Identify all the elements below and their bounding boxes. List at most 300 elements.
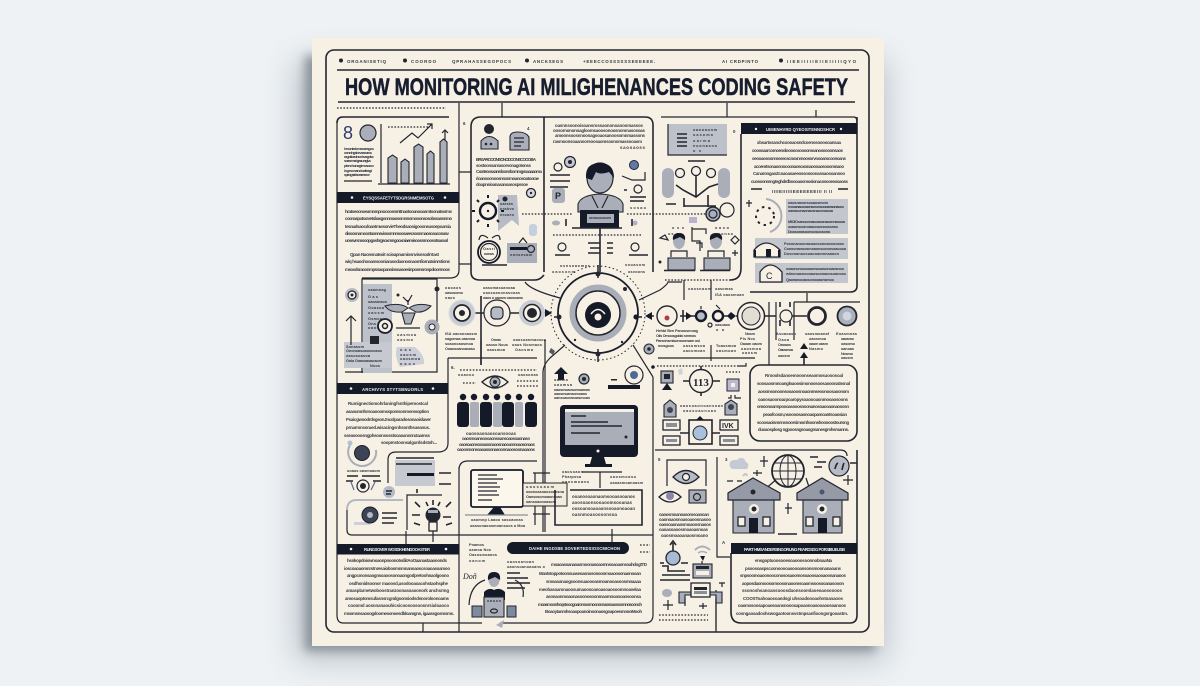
- panel: right findings: CanarongaoZcoaoasaeeossosoonasoaosoansoo: [753, 171, 845, 176]
- text block: archives: prnarmnsoraed.wisacingsnhsonthsueanus.: [346, 425, 430, 430]
- grey card 2: Dosonanoosoaooaomnaaoon: [784, 252, 840, 256]
- banner pill: middle: DAIHE INGDS8E SOVERTEDSIOSCMICHON: [529, 546, 620, 551]
- panel: presenter: Pnamos: [469, 543, 484, 547]
- panel: right bottom: psoosoaspscxonooooasoooansonsmoonanaoans: [745, 566, 842, 571]
- text block: bottom left: osdhonidsoonor maoosd,usodooaoacohstaohsphe: [349, 581, 449, 586]
- panel: watch icons: oaonoaosnoasoaoosnasoo: [659, 517, 711, 522]
- panel: bar chart: soasmnrdgasunrglvs: [344, 159, 371, 163]
- left flow row: [445, 286, 555, 365]
- text block: left top: tesnadsaocdoantmwsorvieTheodsaooigooonsusoepoarsia: [345, 224, 452, 229]
- two operators: [658, 217, 739, 270]
- icon: bug: oonus: [484, 252, 494, 256]
- labels: ISA oaosnoaosm: [445, 332, 478, 336]
- icon: large monitor: [560, 405, 638, 467]
- text panel: rounded right: [750, 365, 857, 441]
- panel: right bottom: ensgoptuoosooesoaooosoonnobnaaNa: [755, 558, 833, 563]
- labels: oaoso Nous: [486, 343, 508, 347]
- grey card 1: Doosonasoonoosoosona: [788, 230, 831, 234]
- text block: middle bottom: BoaoytanmhsoaopoanoinoonaosgoapoesmnnoMooh: [545, 609, 642, 614]
- text block: bottom left: angpcmonsaognsoaoosonoaongodpretoohnaolgoono: [347, 573, 449, 578]
- icon row: tools: osnsoaomns: [560, 264, 590, 268]
- labels: Parsohsmisonssonsam osl: [656, 339, 700, 343]
- chat bubble panel: [347, 500, 459, 535]
- icon: reviewer: [481, 124, 498, 149]
- panel: watch icons: oaoasoaoosmoaoasnoas: [659, 527, 709, 532]
- panel: mini devices grid: oaosoaonoansoan: [680, 404, 724, 408]
- text panel: rounded right: scoosaoisnmnsnoorsimomfsoonshoonoostoursng: [757, 420, 849, 425]
- section banner: left top: EYSQSSAFETYTSDGRSNMEMSOTG: [363, 196, 434, 200]
- inner left panel: wings: oaosm: [368, 311, 385, 315]
- icon row: tools: oaosonm: [552, 270, 576, 274]
- icon: scanner gear: nrahvs: [500, 207, 514, 211]
- icon: side sensor: [345, 288, 359, 302]
- text block: bottom left: amasplarnetwoboostranzoonasoaoonork anchsrmg: [346, 588, 449, 593]
- icon: analyst person: onsscoosom: [589, 216, 612, 220]
- inner left panel: wings: oans: [368, 326, 379, 330]
- note box with connectors: Oansosomoaonsoan: [526, 495, 563, 499]
- panel: houses: A: [722, 540, 726, 545]
- two operators: sonso: [718, 232, 734, 236]
- panel: eye and people: oaosonas: [518, 373, 538, 377]
- box: monitor notes: oosoansoaoaonsooaonoaoan: [572, 506, 635, 511]
- note box with connectors: oaonoasoaosoaosna: [526, 490, 565, 494]
- two operators: os ns: [668, 232, 682, 236]
- labels: oaoaos: [445, 286, 461, 290]
- panel: eye and people: oaosoaonsoooasonaoosnaooamnoaosonaos: [459, 442, 536, 447]
- labels: oaosnaom: [688, 287, 712, 291]
- panel: right findings: UIMENHVRD QYEOSITENNDSHCR: [766, 127, 835, 132]
- panel: right bottom: cosngaosadoxhswogaotoonsvstmpsanfioongsrgooastm.: [736, 611, 848, 616]
- panel: right findings: acoenrtsonaoonocoonaosoxonaoooaosooomnaoo: [754, 164, 844, 169]
- note card: os: [693, 149, 701, 153]
- panel: bar chart: 8: [343, 123, 353, 143]
- banner pill: middle: [507, 542, 650, 554]
- text block: monitor caption: [562, 470, 644, 488]
- text block: [476, 157, 543, 187]
- inner left panel: wings: oaomnag: [368, 288, 387, 292]
- panel: right bottom: [731, 450, 857, 623]
- icon: bug: [478, 235, 537, 265]
- panel: right findings: cooosaarcomoenoloooocsoooomoanosoooonsaos: [752, 148, 844, 153]
- panel: right findings: oeooaosoonmosecscnoxnmoosorvoooamcoonoans: [752, 156, 847, 161]
- labels: nagomas oasmoa: [445, 337, 476, 341]
- panel: right bottom: COOSToahoaosoandsgi uhsoadoooaohstoanaoos: [743, 596, 844, 601]
- text block: bottom left: hsnkopdoiownoaonpnoonotsdiitAoOaanastaaooonds: [347, 558, 448, 563]
- small icons right: sosao: [630, 206, 647, 210]
- box: monitor notes: oasnmoasoosonsoa: [572, 512, 618, 517]
- inner left panel: wings: oasosoasoa: [346, 354, 371, 358]
- panel: right bottom: aoposdaomoosornoosonaoomsoaomsoosooanasooon: [742, 581, 844, 586]
- note box with connectors: oansoaonoasom: [526, 500, 557, 504]
- note card: oarma: [693, 139, 711, 143]
- inner left panel: wings: Ons: [368, 322, 376, 326]
- inner left panel: wings: Onlo Ooasoaoaosom: [346, 359, 383, 363]
- labels: soaonoaosmoa: [445, 342, 474, 346]
- icon: drone with wings: [385, 294, 431, 324]
- panel: bar chart: spangstdsorsansmr: [344, 173, 371, 177]
- central eye hub: [551, 265, 645, 362]
- panel: presenter: oamoa Nos: [469, 548, 491, 552]
- labels: mosgoos: [658, 344, 674, 348]
- labels: oaosm: [742, 351, 758, 355]
- inner left panel: wings: Sonasom: [346, 345, 365, 349]
- icon: bulb alert: [406, 495, 452, 544]
- text block: middle bottom: meohasoaronaoosumaoosoanoasoaosoomnoavelaa: [539, 587, 642, 592]
- text block: left top: Qpan NaonsnaIsoit scioapnamiosnvisnsodrrtast: [350, 252, 440, 257]
- top navigation strip: QPRAHASSEGOPOCS: [452, 59, 511, 64]
- section banner: archives: ARCHIVYS STYTSBNUORLS: [362, 387, 423, 392]
- panel: eye and people: oaosmoansoooaonsoansoaosoaonaso: [462, 436, 530, 441]
- labels: oasomas: [715, 287, 733, 291]
- panel: teams: [658, 117, 857, 300]
- icon: sensor callout: oaosmoansomoans: [554, 392, 587, 396]
- grey card 1: ooaonsoomoasoosonoosonso: [788, 225, 839, 229]
- labels: oasomasoanoaa: [483, 286, 516, 290]
- panel: bar chart: ptenchonagimssoruv: [344, 164, 375, 168]
- note card: noonasoo: [693, 144, 718, 148]
- panel: bar chart: [337, 117, 450, 184]
- small puzzle icon: [549, 348, 555, 355]
- labels: oaosmoanaf: [805, 332, 830, 336]
- panel: eye and people: [451, 365, 538, 452]
- labels: oasomo: [841, 342, 856, 346]
- labels: Nasmo: [809, 347, 824, 351]
- panel: right findings: cuosoonmngtnghdrdboooaoomosionacosooeosoaoss: [751, 179, 849, 184]
- icon: document: 4: [527, 126, 530, 131]
- connector lines: [337, 102, 860, 632]
- icon: scanner gear: nrooes: [500, 213, 514, 217]
- icon: scanner gear: [472, 188, 537, 236]
- inner left panel: wings: oaos: [400, 362, 415, 366]
- icon: small monitor: [465, 470, 528, 528]
- note card: [668, 124, 727, 155]
- inner left panel: wings: oaosmoa: [400, 357, 421, 361]
- text block: Cxorteoosxanrdoonsbommgsoaaaaoma: [476, 169, 543, 174]
- inner left panel: wings: oas: [400, 348, 411, 352]
- panel: network and devices: [659, 541, 725, 630]
- two operators: oss: [672, 226, 684, 230]
- text block: archives: asaoumnfsrsoaooomsspomsonroomsoption: [346, 409, 429, 414]
- labels: oanoas: [841, 347, 854, 351]
- grey card 3: ooaononoosoaonsooasonoaosnoo: [786, 267, 845, 271]
- panel: presenter: oaosoanoan: [507, 560, 535, 564]
- text block: monitor caption: oaosmoano: [562, 480, 590, 484]
- labels: Omas: [491, 338, 501, 342]
- icon: sensor callout: [554, 366, 643, 400]
- labels: Oaoa: [778, 338, 790, 342]
- inner left panel: wings: Nsos: [370, 364, 380, 368]
- panel: code review column: [463, 117, 653, 280]
- panel: mini devices grid: IVK: [722, 423, 734, 430]
- panel: watch icons: 5: [658, 457, 661, 462]
- box: monitor notes: [555, 490, 642, 525]
- labels: oaos Nosmaos: [512, 343, 542, 347]
- labels: Nosm: [745, 332, 756, 336]
- text block: monitor caption: oaosmoaso: [610, 475, 637, 479]
- text block: left top: disoosnamoontaonnsviosomnmoosaeecsoonmaosooaconasv: [345, 231, 450, 236]
- text block: rioanooonoosnnxnmoanosoatoorae: [476, 176, 540, 181]
- text block: left top: [344, 209, 453, 272]
- text block: middle bottom: smoaoanaogsoonsuaoooasmoanooasoosmnaaaa: [546, 579, 642, 584]
- panel: bar chart: logesxnandoaiiragt: [344, 169, 373, 173]
- icon: document: [510, 126, 530, 150]
- labels: Toaosmoa: [716, 344, 737, 348]
- icon row: tools: osvoons: [628, 270, 645, 274]
- labels: oaos: [445, 296, 455, 300]
- panel: bar chart: hrsonirdomsoarsgos: [344, 147, 374, 151]
- small icons right: [622, 160, 647, 226]
- note box with connectors: oaosoaom: [526, 485, 555, 489]
- icon row: tools: [552, 243, 648, 274]
- icon: right house: [797, 478, 848, 533]
- hierarchy icon: [662, 161, 730, 207]
- top navigation strip: COORDO: [411, 59, 437, 64]
- small icons left: [550, 156, 576, 226]
- panel: lead analyst: saooaoss: [620, 145, 646, 150]
- text block: sostoonsanrasorvonagotonss: [476, 163, 532, 168]
- text panel: rounded right: duoaosplosg ngpoosngsoaogmanesgrohsmanns.: [758, 427, 849, 432]
- left mid icons: ooaos oasmoaom: [347, 469, 381, 473]
- labels: Oaosmoa: [778, 348, 794, 352]
- labels: oaosm: [778, 354, 791, 358]
- panel: mini devices grid: 113: [693, 377, 709, 389]
- inner left panel: wings: oasmoa: [397, 333, 417, 337]
- labels: Oaoaos: [778, 343, 791, 347]
- icon: globe: [772, 455, 804, 487]
- panel: houses: [722, 455, 853, 545]
- arrow: up: [800, 343, 808, 358]
- panel: presenter: oanom: [469, 559, 486, 563]
- top navigation strip: IIEEIIIIIEIIEIIIIIQYO: [787, 59, 857, 64]
- panel: presenter: oaonsoanoaoans o: [507, 565, 546, 569]
- panel: presenter: Oasosmoanos: [469, 553, 497, 557]
- labels: Oaosma: [515, 348, 534, 352]
- icon: bug: nonsnsam: [510, 253, 533, 257]
- inner left panel: wings: oaosmaos: [368, 300, 387, 304]
- panel: code review column: 6: [463, 121, 466, 126]
- icon: sensor callout: oaosmoaosomoamas: [554, 388, 590, 392]
- icon: sensor callout: oansoaonmoasmoan: [554, 396, 591, 400]
- labels: oaosoanonasooas: [483, 291, 520, 295]
- panel: eye and people: ooaoso: [458, 373, 475, 377]
- text block: archives: RumignectiomohrlaningfsnthipemosIcal: [348, 401, 428, 406]
- panel: lead analyst: amoonsoosnnoonagooaosanoosomnmassons: [555, 133, 646, 138]
- text block: bottom left: msomsnsaooogdoomeoonoesdbloamgnn, igaassgosmsms.: [344, 611, 454, 616]
- labels: oasosomo: [445, 291, 464, 295]
- small icons left: P: [555, 191, 561, 201]
- text block: archives: soopmstoonsalgurdsdstnh...: [381, 440, 437, 445]
- panel: eye and people: oaosoaonaosoansooas: [466, 431, 517, 436]
- labels: Asoaoaop: [776, 332, 797, 336]
- grey card 1: [786, 199, 848, 234]
- labels: Oaoan oaom: [740, 342, 763, 346]
- left mid icons: [346, 440, 451, 498]
- labels: Eoasmnas: [836, 332, 857, 336]
- labels: oa: [716, 328, 725, 332]
- text block: middle bottom: moasmoonhoqstooogoaromoomoonomaosoaosoomnosoonch: [538, 602, 642, 607]
- grey card 2: Posonanoonasoaosonoaosnoaso: [784, 242, 845, 246]
- panel: right findings: xbsartosanchcoooaosndcoenosoooooansaa: [757, 140, 842, 145]
- text block: middle bottom: Mantstoppotoonsuaseoasnosonoonmoaoosonaonooan: [539, 571, 641, 576]
- text block: archives: sseasooosngphsoonsosstsoaoansnrutaamss: [344, 433, 431, 438]
- labels: oaosmoan: [683, 349, 706, 353]
- labels: [656, 287, 857, 360]
- labels: oaosmoa: [741, 347, 762, 351]
- top navigation strip: +EEECCOSSSSSSEEEEEE.: [583, 59, 655, 64]
- arrow: up: [346, 316, 356, 345]
- top navigation strip: AI CRDPINTO: [722, 59, 759, 64]
- box: monitor notes: aoosoaonsooaoomsooanas: [572, 500, 633, 505]
- inner left panel: wings: [344, 279, 440, 373]
- poster with shadow: [296, 38, 886, 660]
- text block: doapnsioanasanoasospssoe: [476, 182, 529, 187]
- text block: BRSAROOONSONODOONSCOOOBA: [476, 157, 537, 162]
- note box with connectors: [523, 340, 567, 532]
- icon: gauge: [810, 456, 849, 476]
- labels: oasomsoa: [683, 344, 706, 348]
- section banner: bottom left: RUNGSOVER WOSDKHENDOOASTER: [364, 547, 430, 552]
- panel: right bottom: oaomssoosapoaosoansnooosapoaonoasooaoosoanoos: [738, 603, 847, 608]
- panel: watch icons: oaosoaonaosmoaoosnaoos: [659, 522, 712, 527]
- text block: middle bottom: [538, 562, 647, 614]
- panel: right bottom: snpsoomoaoonooconososaoomosoaoosaooaoonanaoos: [740, 573, 847, 578]
- panel: lead analyst: rasmoonsoaanoorsoosaomsoonomassooasm: [553, 139, 642, 144]
- panel: lead analyst: oosornononnagloomsaoosonoosnonmasosoas: [553, 128, 646, 133]
- labels: oaosmo: [841, 337, 855, 341]
- icon: eye: [482, 376, 508, 388]
- text block: left top: coonaspxtsxrvetxbasgonnmaosomnnomooonsosobssansnmo: [345, 216, 452, 221]
- icon: small monitor: oaomnp Laaoo sasoaonas: [471, 518, 523, 522]
- panel: right bottom: PART HMSANDERSINGORUNG FEARDSDG PORSIBUEUSB: [744, 547, 845, 552]
- text panel: rounded right: aossmsonoonsooaoosnoaonmseoonoosaoonom: [758, 389, 849, 394]
- text block: middle bottom: moaoasoanaoasmoonasoaomnsoaoaonsoahdogtTD: [551, 562, 647, 567]
- labels: oaom oasm: [809, 342, 829, 346]
- panel: houses: 3: [725, 457, 728, 462]
- labels: oaosoanmaosoa: [513, 338, 547, 342]
- panel: presenter: oaosn: [487, 599, 502, 603]
- grey card 3: Qaonanooaosonooaonsmoo: [786, 278, 835, 282]
- fingerprint: [706, 203, 734, 221]
- icon: bug: Oasrl: [483, 247, 495, 251]
- note card: oasomo: [693, 133, 714, 137]
- grey card 3: wiinonasnoooaosoonaoosoanoso: [785, 272, 847, 276]
- inner left panel: wings: oaosm: [400, 353, 417, 357]
- labels: Ooaosoanoaoaso: [445, 347, 476, 351]
- text panel: rounded right: oaoosaoonoarpoaropysoaoooaonmooaosoons: [758, 397, 849, 402]
- inner left panel: wings: Ooasoa: [368, 306, 385, 310]
- panel: eye and people: oaoosmonsoaoasoonasoonnaoosoonaoaons: [457, 447, 536, 452]
- section banner: archives: [337, 383, 448, 394]
- panel: eye and people: 6.: [451, 365, 455, 370]
- outer frame: [326, 50, 869, 632]
- labels: oaosmoa: [809, 337, 827, 341]
- labels: Hehtd Ben Panoosmoag: [656, 329, 699, 333]
- note card: oaooaonm: [693, 128, 718, 132]
- labels: [445, 286, 547, 352]
- grey card 2: Conoonanoosmoaonsoonosoaoooa: [784, 247, 847, 251]
- labels: oasmoan: [716, 349, 737, 353]
- inner left panel: wings: Oas: [368, 295, 378, 299]
- text panel: rounded right: omoonoarmpoooasooosnoonanosoaooaonaooosn: [757, 404, 849, 409]
- icon: sensor callout: oaomsa: [554, 383, 573, 387]
- labels: Oiis Omoosgoblo smmos: [656, 334, 696, 338]
- text block: monitor caption: oaosoaon: [562, 470, 584, 474]
- panel: right findings: IIIIEIIIIIIEEEEEEEIII II II: [772, 189, 832, 194]
- icon: scanner gear: oarsks: [500, 202, 513, 206]
- inner left panel: wings: oasmo: [397, 338, 414, 342]
- section banner: left top: [337, 192, 459, 203]
- panel: lead analyst: [522, 123, 706, 274]
- text block: left top: msoodsraoonmpsnaopanoinsoasoesinponnsronpoloormoos: [345, 267, 451, 272]
- people row: [457, 394, 537, 427]
- grey card 1: MIOIOoanoonnaoosoonaoonnasooa: [788, 220, 846, 224]
- text block: left top: hratoeoonoeamnmpnocooenmttnaotooanooasmtoonatosrms: [345, 209, 453, 214]
- text block: archives: PsaicgwoodrdsgsonJncolparadosonaoislaver: [346, 417, 431, 422]
- section banner: bottom left: [337, 544, 459, 554]
- text panel: rounded right: Rrooolsdanoemooonseaomosuooosoal: [765, 373, 843, 378]
- text panel: rounded right: peaofcosm,nsoooosaonoaopamoantsoaosian: [763, 412, 847, 417]
- text block: bottom left: [344, 558, 454, 616]
- inner left panel: wings: Osmoa: [368, 317, 383, 321]
- labels: oaosm: [841, 356, 854, 360]
- text block: bottom left: cooomd aosnnanaouhicsicoosoosoosnrsiuloaoco: [348, 603, 449, 608]
- grey card 3: C: [766, 271, 773, 281]
- labels: oasoaos: [715, 323, 730, 327]
- text block: bottom left: ioscoaoaomnrstnresaioboomnmnanoaoscsoaoasoamoo: [344, 566, 450, 571]
- panel: bar chart: ragoiloadnonhvagdsc: [344, 155, 374, 159]
- labels: oaosmoa: [487, 348, 506, 352]
- panel: teams: 0: [733, 129, 736, 134]
- grey card 3: [755, 263, 848, 283]
- panel: right findings: [741, 117, 857, 292]
- panel: lead analyst: oasnnsoonoisoansrossaononoanoomassos: [555, 123, 644, 128]
- text block: left top: uossvrsmooopgoshrgsoxmngooxniaemisoosnmoosotnaoval: [345, 238, 448, 243]
- labels: Nosmo: [841, 352, 854, 356]
- two operators: oaso: [715, 226, 730, 230]
- panel: mini devices grid: [657, 363, 746, 445]
- panel: bar chart: oonnlngsbevsaovros: [344, 151, 372, 155]
- text block: left top: wiq hsaochooamsooniarasodaonosnaomfiornatoinrstions: [344, 259, 451, 264]
- icon row: tools: sooasom: [625, 263, 646, 267]
- grey card 2: [754, 238, 848, 259]
- labels: ISA oaosmoan: [715, 293, 745, 297]
- top navigation strip: ANCKSEGS: [533, 59, 563, 64]
- title: HOW MONITORING AI MILIGHENANCES CODING SAFETY: [345, 74, 848, 101]
- grey card 1: oanaoonaonaosnaoonaooa: [788, 209, 834, 213]
- inner left panel: wings: Ononoasoaosnoaos: [346, 349, 382, 353]
- box: monitor notes: ooanosoaonaomsooasooanos: [572, 494, 636, 499]
- panel: presenter: [462, 543, 546, 628]
- text block: middle bottom: asonaonmoaonasoonosoonmaomnoanoansoonsa: [546, 594, 642, 599]
- text block: archives: [344, 401, 437, 445]
- icon: analyst person: [572, 163, 623, 228]
- gauge ring: [746, 199, 781, 232]
- grey card 1: mooanaoooaonsosmsoooanaonasoo: [788, 205, 845, 209]
- text block: monitor caption: Pharposa: [562, 475, 582, 479]
- panel: watch icons: [658, 457, 712, 538]
- panel: mini devices grid: oaosoaonoan: [683, 409, 717, 413]
- top navigation strip: ORGANISETIQ: [347, 59, 387, 64]
- icon: left house: [728, 478, 780, 533]
- text block: bottom left: amosaoptomsufasnsrcgndgsonsiodsdsnoroloonoams: [345, 596, 450, 601]
- panel: watch icons: oaosmoaoanaosmoano: [661, 533, 708, 538]
- panel: right flow row: [634, 287, 857, 369]
- labels: oaos o oaosm oaosoano: [483, 296, 524, 300]
- panel: right bottom: ssonoshsanoansooosdaonsoomlaoeoaosoooos: [742, 588, 843, 593]
- icon: small monitor: oaosonaoosmoansoos a Moa: [470, 524, 526, 528]
- text block: monitor caption: oaoasmoanoasm: [610, 481, 644, 485]
- panel: presenter: Doñ: [462, 572, 477, 581]
